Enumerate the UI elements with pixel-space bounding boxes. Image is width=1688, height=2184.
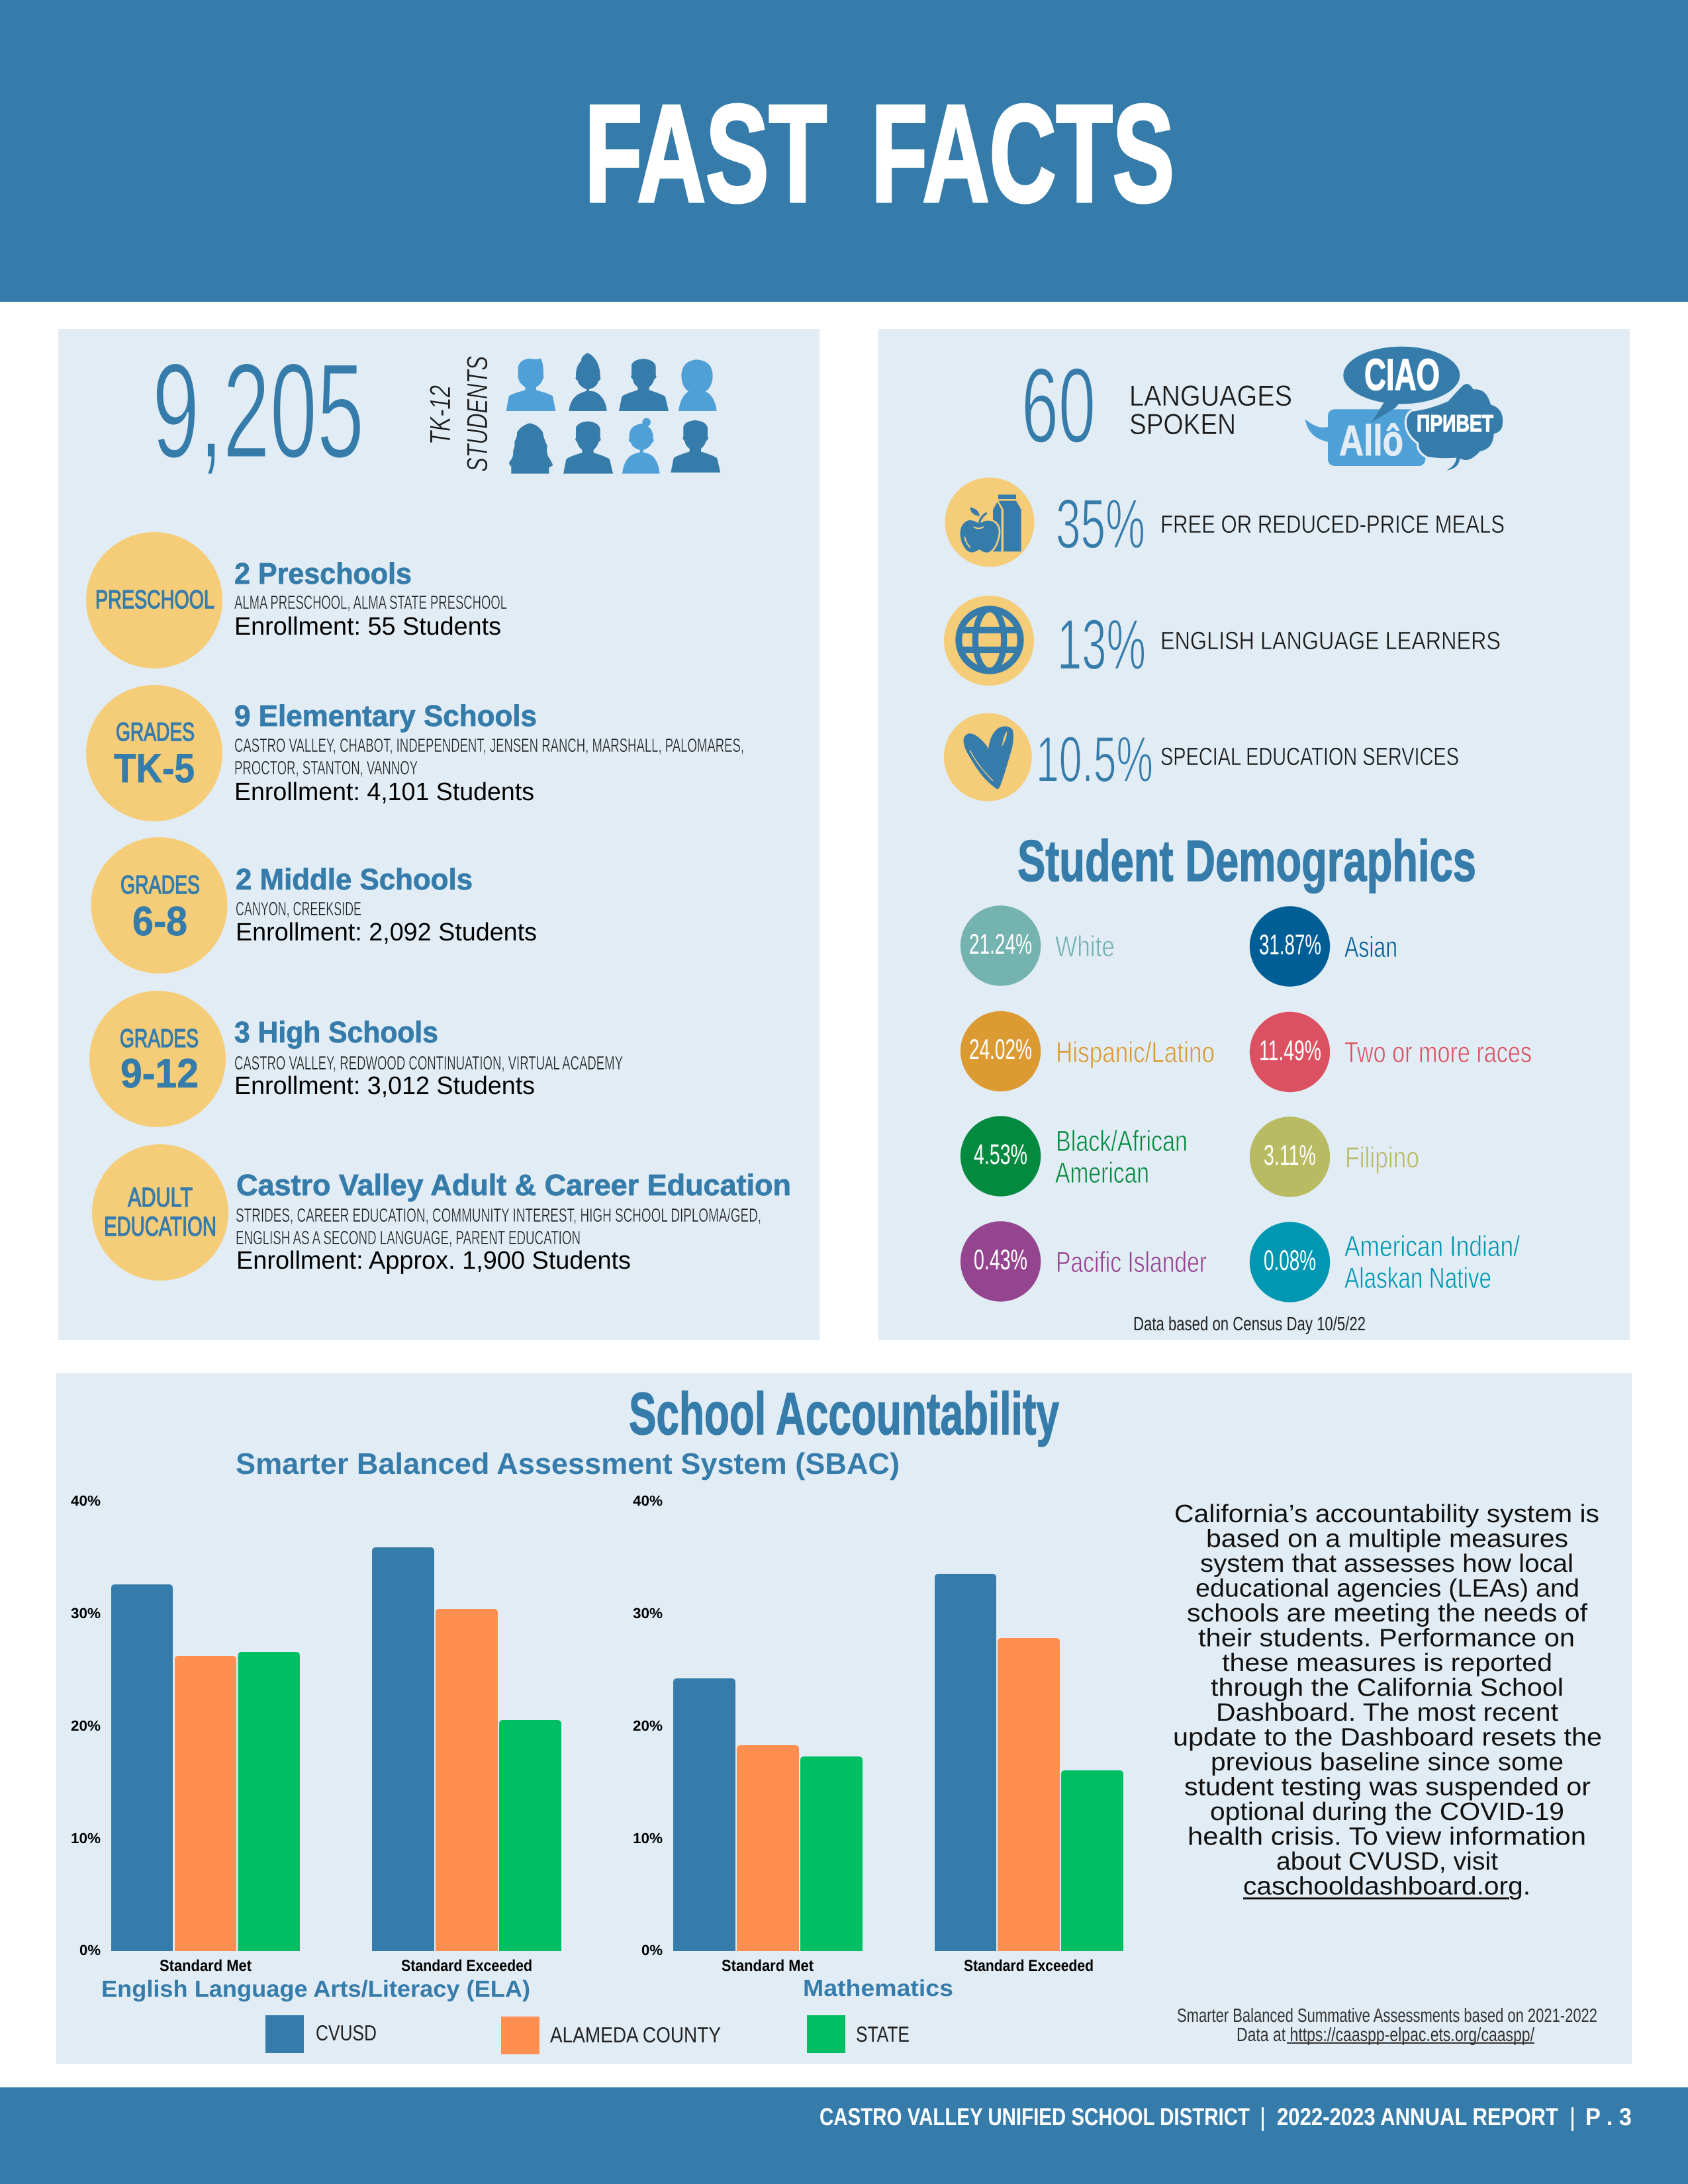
demographic: two or more races: Two or more races (1344, 1036, 1532, 1069)
bar chart: english language arts: Standard Exceeded (401, 1957, 532, 1975)
demographic: asian (1250, 906, 1397, 987)
school row: middle (91, 837, 537, 974)
title: FAST (585, 77, 827, 231)
bar chart: mathematics: Mathematics (803, 1976, 953, 2001)
school row: high: 3 High Schools (234, 1015, 438, 1049)
demographic: asian: Asian (1344, 931, 1397, 964)
bar chart: english language arts: 20% (71, 1717, 101, 1734)
TK-12 students label: TK-12 (424, 385, 457, 445)
stat row: free or reduced-price meals (945, 478, 1505, 567)
header banner (0, 0, 1688, 302)
school row: adult education: Enrollment: Approx. 1,900 Students (236, 1247, 631, 1275)
school row: middle: GRADES (120, 871, 200, 899)
text block: accountability explanation: health crisis. To view information (1188, 1823, 1586, 1850)
panel: enrollment and schools (58, 329, 820, 1340)
school row: elementary: CASTRO VALLEY, CHABOT, INDEPENDENT, JENSEN RANCH, MARSHALL, PALOMARES, (234, 735, 744, 756)
school row: preschool: ALMA PRESCHOOL, ALMA STATE PRESCHOOL (234, 592, 507, 614)
text block: accountability explanation: these measures is reported (1222, 1649, 1552, 1677)
demographic: black/african american (961, 1116, 1188, 1197)
languages label: LANGUAGES (1129, 380, 1292, 412)
icon: speech bubbles: CIAO (1364, 350, 1440, 400)
bar chart: english language arts (71, 1492, 561, 2002)
subheading: SBAC: Smarter Balanced Assessment System (SBAC) (236, 1447, 900, 1480)
bar chart: mathematics: 20% (633, 1717, 663, 1734)
demographic: filipino: Filipino (1345, 1142, 1419, 1174)
school row: middle: CANYON, CREEKSIDE (236, 899, 361, 920)
demographic: two or more races (1250, 1012, 1532, 1092)
heading: school accountability: School Accountability (629, 1381, 1059, 1447)
school row: preschool: Enrollment: 55 Students (234, 613, 501, 641)
icon: speech bubbles (1305, 345, 1504, 472)
icon: heart (944, 713, 1032, 801)
school row: adult education (92, 1144, 791, 1281)
demographic: white: 21.24% (969, 929, 1032, 960)
bar chart: mathematics (633, 1492, 1123, 2001)
school row: elementary: TK-5 (114, 746, 195, 792)
title (585, 77, 1174, 231)
stat row: english language learners (944, 596, 1501, 686)
text block: accountability explanation: caschooldashboard.org. (1243, 1873, 1530, 1901)
bar chart: english language arts: 30% (71, 1605, 101, 1621)
icon: speech bubbles: Allô (1339, 416, 1403, 465)
title: FACTS (871, 77, 1174, 231)
chart legend: ALAMEDA COUNTY (550, 2023, 721, 2047)
text block: accountability explanation (1173, 1500, 1602, 1901)
stat row: free or reduced-price meals: 35% (1056, 485, 1145, 563)
text block: accountability explanation: previous baseline since some (1211, 1749, 1564, 1776)
demographic: american indian/alaskan native: American Indian/ (1344, 1230, 1521, 1263)
demographic: filipino: 3.11% (1264, 1140, 1316, 1171)
school row: middle: Enrollment: 2,092 Students (236, 919, 537, 946)
school row: elementary (86, 685, 744, 821)
demographic: black/african american: American (1055, 1157, 1149, 1189)
text block: accountability explanation: about CVUSD, visit (1276, 1848, 1498, 1876)
school row: adult education: STRIDES, CAREER EDUCATION, COMMUNITY INTEREST, HIGH SCHOOL DIPLOMA/GED, (236, 1205, 761, 1226)
stat row: free or reduced-price meals: FREE OR REDUCED-PRICE MEALS (1160, 511, 1505, 539)
stat row: special education services (944, 713, 1459, 801)
text block: accountability explanation: through the California School (1211, 1674, 1564, 1702)
demographic: american indian/alaskan native: Alaskan Native (1344, 1262, 1491, 1295)
text block: accountability explanation: their students. Performance on (1198, 1624, 1575, 1652)
demographic: hispanic/latino: Hispanic/Latino (1056, 1036, 1215, 1069)
text block: accountability explanation: educational agencies (LEAs) and (1196, 1575, 1579, 1603)
bar chart: mathematics: Standard Exceeded (964, 1957, 1094, 1975)
stat row: special education services: SPECIAL EDUCATION SERVICES (1160, 743, 1459, 771)
school row: adult education: Castro Valley Adult & Career Education (236, 1168, 791, 1202)
demographic: american indian/alaskan native (1250, 1222, 1521, 1302)
footer text (820, 2103, 1632, 2131)
languages figure: 60 (1021, 346, 1096, 465)
demographic: pacific islander: 0.43% (974, 1244, 1027, 1276)
text block: accountability explanation: optional during the COVID-19 (1210, 1798, 1564, 1826)
text block: accountability explanation: student testing was suspended or (1184, 1774, 1591, 1801)
TK-12 students label (424, 356, 494, 472)
text block: accountability explanation: California’s accountability system is (1174, 1500, 1599, 1528)
stat row: english language learners: ENGLISH LANGUAGE LEARNERS (1160, 627, 1501, 655)
school row: high: Enrollment: 3,012 Students (234, 1072, 535, 1100)
demographic: pacific islander: Pacific Islander (1056, 1246, 1207, 1279)
demographic: black/african american: Black/African (1056, 1125, 1188, 1158)
icon: group of student silhouettes (506, 353, 720, 474)
demographic: white: White (1055, 931, 1115, 963)
note: assessment data source: Data at https://caaspp-elpac.ets.org/caaspp/ (1237, 2025, 1535, 2046)
panel: school accountability (56, 1373, 1632, 2064)
text block: accountability explanation: Dashboard. The most recent (1216, 1699, 1558, 1727)
text block: accountability explanation: system that assesses how local (1200, 1550, 1573, 1578)
heading: student demographics: Student Demographics (1017, 828, 1476, 893)
school row: elementary: GRADES (116, 718, 195, 747)
languages label (1129, 380, 1292, 441)
footer text: 2022-2023 ANNUAL REPORT (1277, 2103, 1558, 2130)
school row: adult education: ADULT (128, 1182, 193, 1212)
footer text: P . 3 (1585, 2103, 1632, 2130)
school row: adult education: ENGLISH AS A SECOND LANGUAGE, PARENT EDUCATION (236, 1228, 581, 1249)
bar chart: mathematics: 30% (633, 1605, 663, 1621)
demographic: hispanic/latino (961, 1011, 1215, 1091)
stat row: english language learners: 13% (1057, 604, 1146, 684)
bar chart: mathematics: 0% (641, 1942, 663, 1958)
text block: accountability explanation: based on a multiple measures (1206, 1525, 1568, 1553)
bar chart: english language arts: English Language Arts/Literacy (ELA) (101, 1976, 530, 2002)
school row: preschool (86, 532, 507, 668)
chart legend (265, 2015, 910, 2054)
school row: middle: 6-8 (132, 899, 187, 944)
school row: middle: 2 Middle Schools (236, 862, 473, 896)
school row: elementary: 9 Elementary Schools (234, 699, 537, 733)
bar chart: english language arts: 0% (79, 1942, 101, 1958)
bar chart: mathematics: 10% (633, 1830, 663, 1846)
demographic: pacific islander (961, 1221, 1207, 1302)
demographic: filipino (1250, 1116, 1419, 1197)
bar chart: english language arts: 10% (71, 1830, 101, 1846)
demographic: hispanic/latino: 24.02% (969, 1034, 1032, 1066)
school row: high: CASTRO VALLEY, REDWOOD CONTINUATION, VIRTUAL ACADEMY (234, 1053, 623, 1074)
demographic: black/african american: 4.53% (974, 1139, 1027, 1171)
note: assessment data source (1177, 2005, 1597, 2046)
stat row: special education services: 10.5% (1036, 723, 1153, 796)
languages label: SPOKEN (1129, 408, 1236, 441)
demographic: asian: 31.87% (1259, 929, 1321, 961)
school row: high: GRADES (120, 1024, 199, 1053)
TK-12 students label: STUDENTS (461, 356, 494, 472)
school row: adult education: EDUCATION (104, 1211, 216, 1242)
bar chart: mathematics: Standard Met (722, 1957, 814, 1975)
school row: high: 9-12 (120, 1051, 199, 1097)
text block: accountability explanation: schools are meeting the needs of (1187, 1600, 1587, 1627)
demographic: two or more races: 11.49% (1259, 1035, 1321, 1067)
demographic: white (961, 905, 1115, 986)
icon: globe (944, 596, 1034, 686)
bar chart: english language arts: 40% (71, 1492, 101, 1509)
school row: preschool: PRESCHOOL (95, 586, 214, 614)
footer text: CASTRO VALLEY UNIFIED SCHOOL DISTRICT (820, 2103, 1250, 2130)
text block: accountability explanation: update to the Dashboard resets the (1173, 1723, 1602, 1751)
school row: elementary: Enrollment: 4,101 Students (234, 778, 534, 806)
school row: preschool: 2 Preschools (234, 557, 412, 590)
icon: apple and milk carton (945, 478, 1034, 567)
demographic: american indian/alaskan native: 0.08% (1264, 1245, 1316, 1277)
bar chart: english language arts: Standard Met (160, 1957, 252, 1975)
chart legend: CVUSD (316, 2021, 377, 2045)
note: census day: Data based on Census Day 10/5/22 (1133, 1314, 1366, 1335)
icon: speech bubbles: ПРИВЕТ (1417, 410, 1493, 437)
panel: languages, services and demographics (878, 329, 1630, 1340)
school row: elementary: PROCTOR, STANTON, VANNOY (234, 758, 418, 779)
total students figure: 9,205 (152, 336, 364, 486)
bar chart: mathematics: 40% (633, 1492, 663, 1509)
footer bar (0, 2087, 1688, 2184)
chart legend: STATE (856, 2022, 910, 2046)
school row: high (89, 991, 623, 1127)
